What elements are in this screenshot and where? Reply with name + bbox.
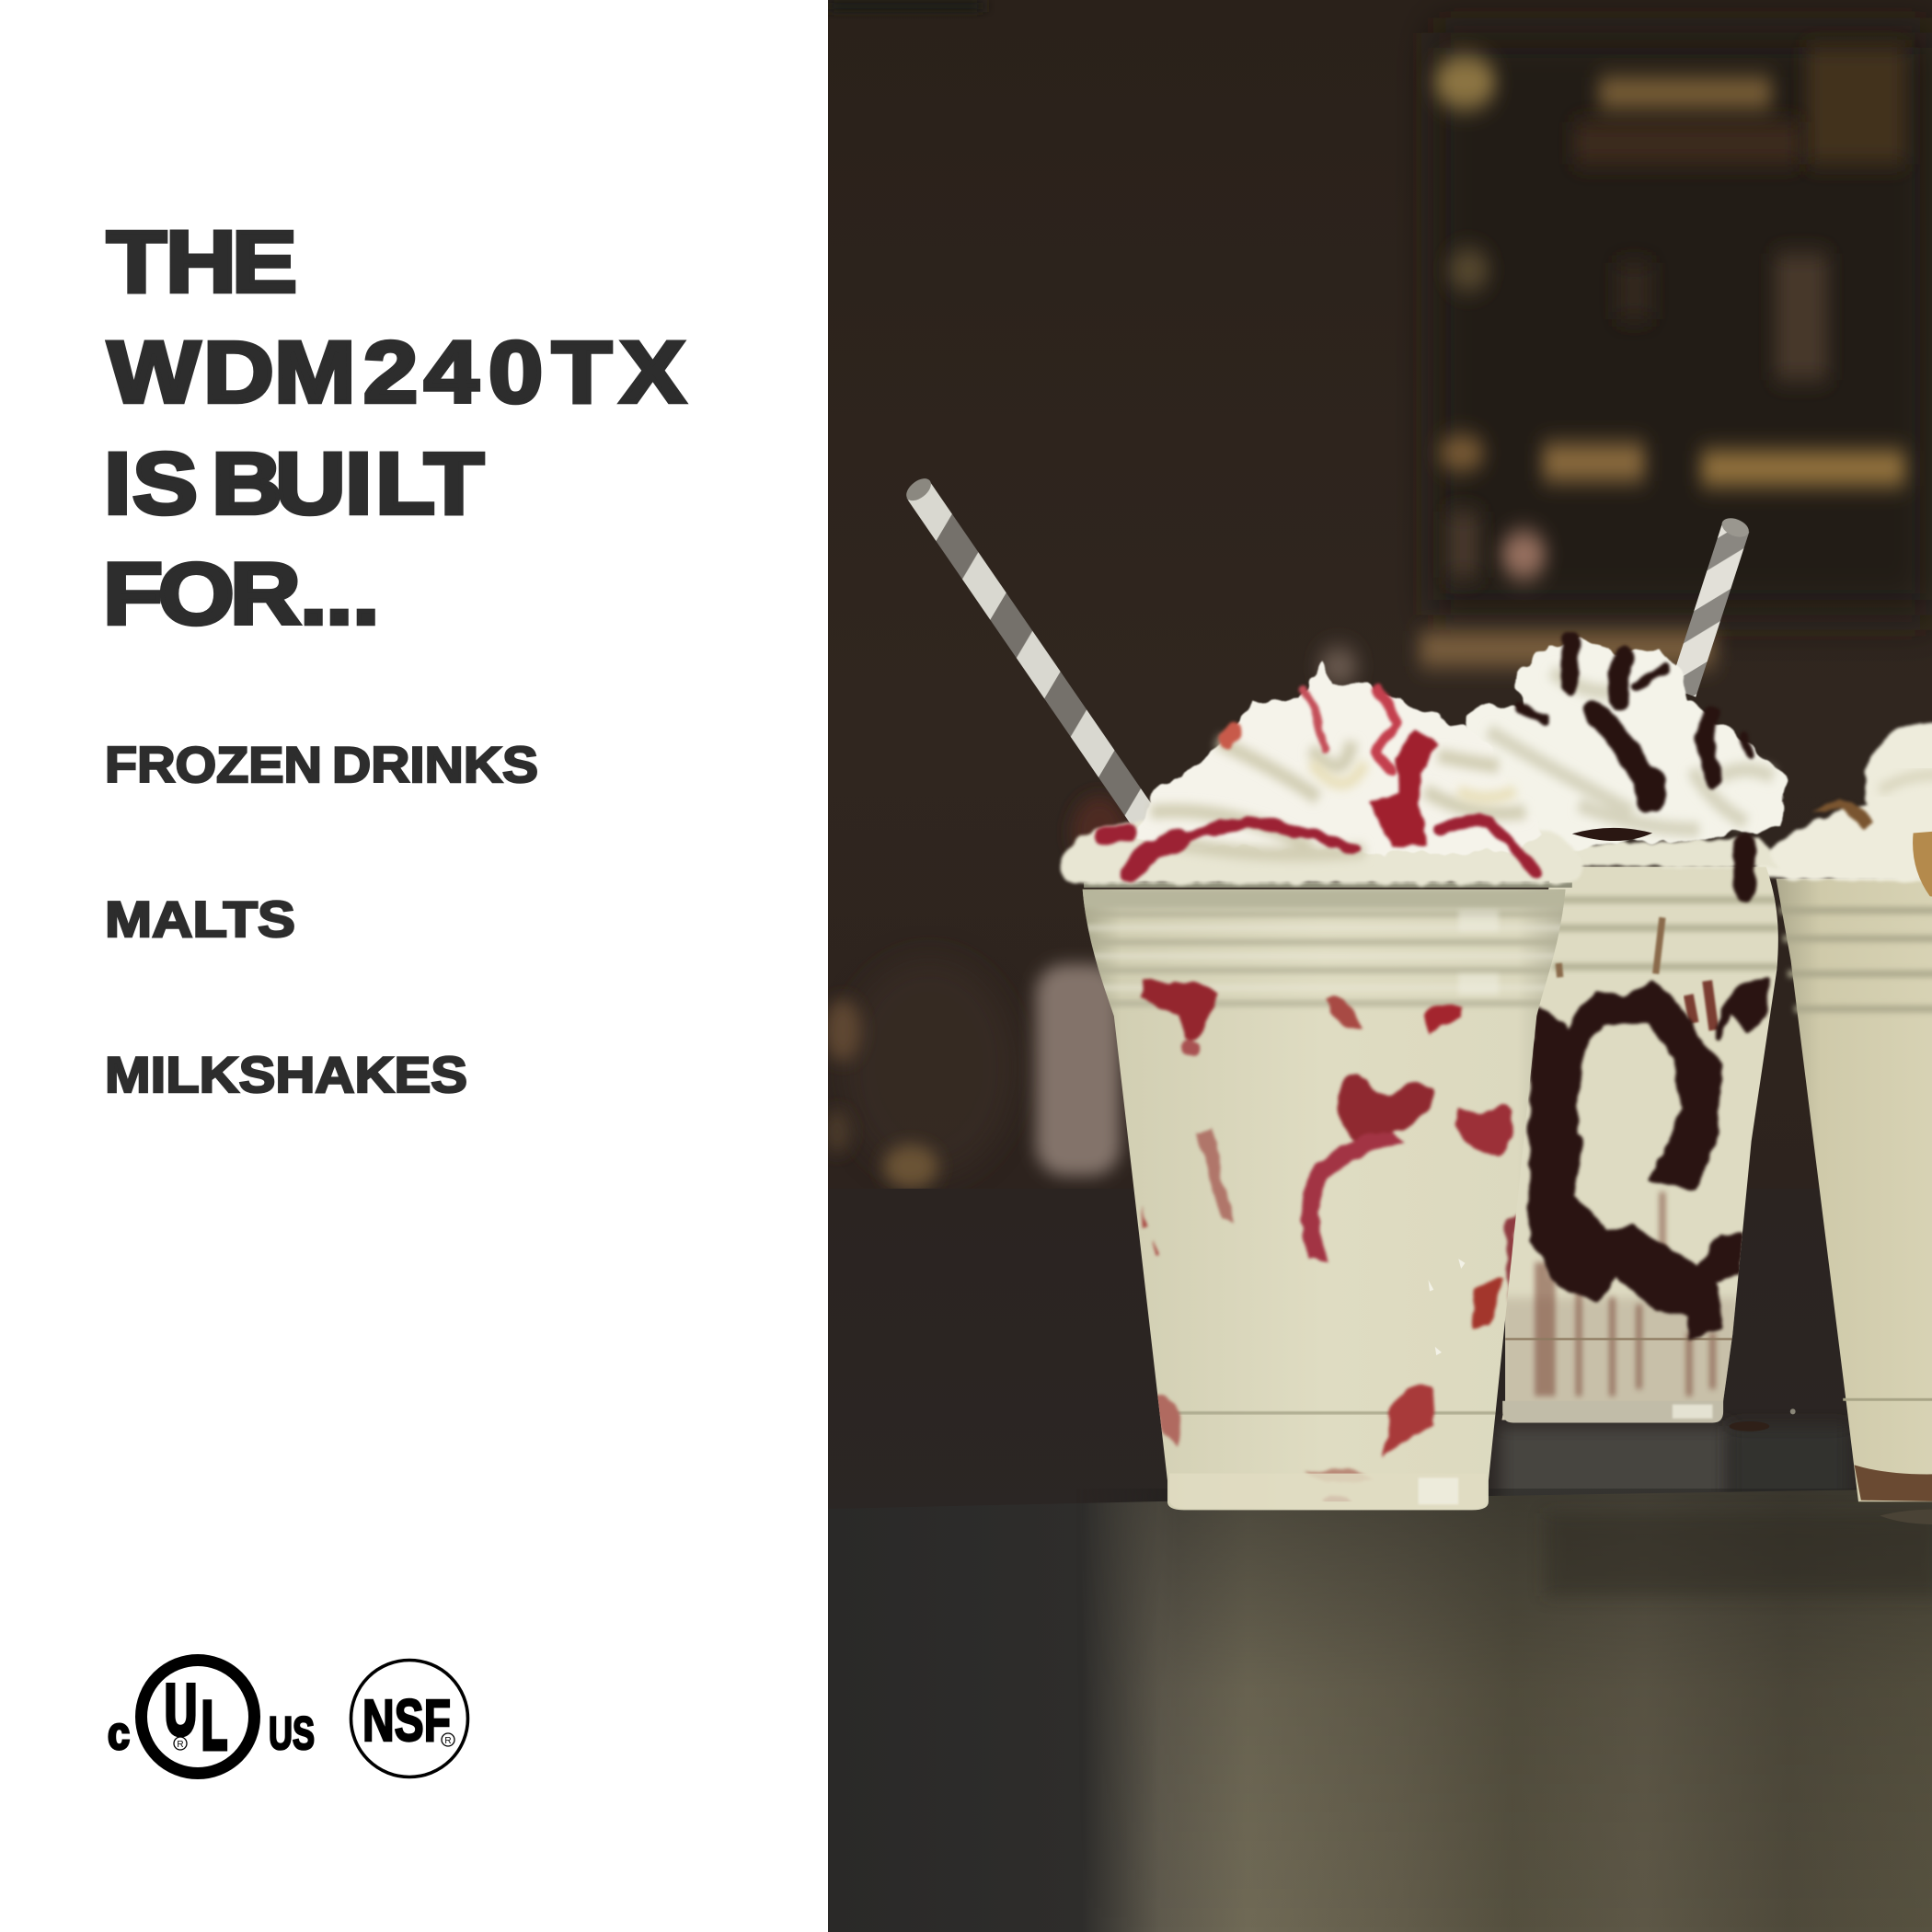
blurred bar lights (828, 0, 1932, 685)
straw: milkshake two (1683, 514, 1752, 692)
milkshakes, drawn in a local coordinate system (903, 474, 1932, 1524)
list: uses: MALTS (105, 891, 295, 948)
straw: milkshake one (903, 474, 1145, 821)
icon: NSF certification mark: NSF (362, 1687, 451, 1754)
reflection of cups in table (828, 1426, 1932, 1932)
icon: cULus certification mark (108, 1660, 315, 1774)
milkshake two (chocolate) (1458, 638, 1786, 1424)
heading: the WDM240TX is built for: FOR... (103, 546, 380, 643)
list: uses: MILKSHAKES (105, 1046, 467, 1103)
panel: milkshake photograph (824, 0, 1932, 1932)
chocolate spill on table (1730, 1409, 1796, 1432)
icon: cULus certification mark: L (201, 1687, 227, 1764)
panel: white text column (0, 0, 828, 1932)
table surface (828, 1189, 1857, 1509)
milkshake one (strawberry) (1059, 662, 1583, 1510)
icon: cULus certification mark: c (108, 1708, 130, 1759)
icon: cULus certification mark: US (269, 1708, 315, 1759)
list: uses (105, 736, 538, 1103)
icon: cULus certification mark: U (165, 1669, 197, 1750)
heading: the WDM240TX is built for (103, 213, 685, 643)
water droplets (1429, 1259, 1465, 1355)
whipped cream, chocolate shake (1458, 638, 1786, 891)
icon: NSF certification mark (351, 1660, 467, 1777)
icon: cULus certification mark: R (177, 1740, 184, 1750)
heading: the WDM240TX is built for: THE (107, 213, 297, 311)
chocolate swirl (1531, 980, 1769, 1338)
list: uses: FROZEN (105, 736, 322, 793)
heading: the WDM240TX is built for: BUILT (212, 435, 484, 533)
whipped cream, strawberry shake (1059, 662, 1583, 884)
icon: NSF certification mark: R (444, 1736, 452, 1746)
wall background (828, 0, 1932, 1191)
milkshake three (right, cropped) (1757, 723, 1932, 1524)
heading: the WDM240TX is built for: IS (104, 435, 198, 533)
blurred bottle and left-side lights (824, 796, 1127, 1189)
list: uses: DRINKS (332, 736, 538, 793)
heading: the WDM240TX is built for: WDM240TX (108, 324, 685, 421)
